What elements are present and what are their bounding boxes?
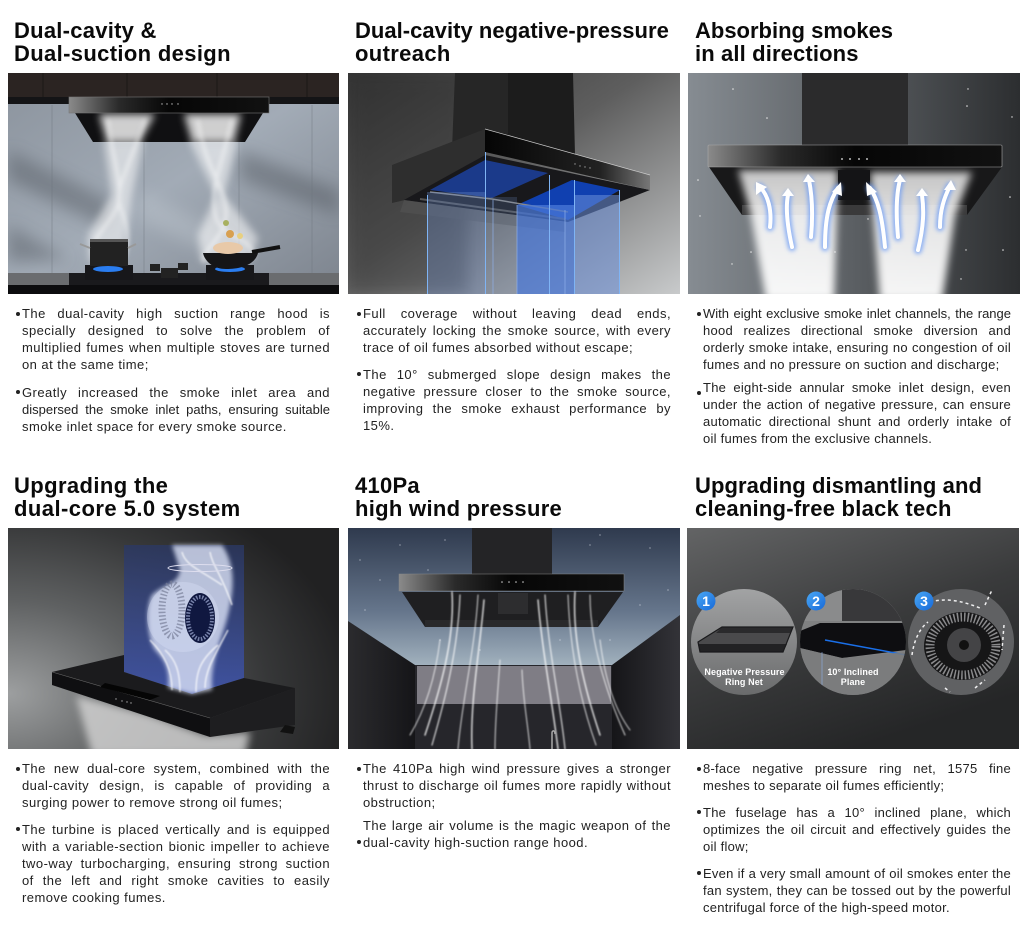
text: column 2 bottom (357, 761, 671, 850)
inset: negative pressure ring net: Negative Pressure (704, 667, 785, 677)
inset: 10 degree inclined plane (800, 589, 906, 695)
text: column 3 top (697, 306, 1011, 446)
photo: hood with blue negative-pressure columns (348, 73, 680, 294)
text: column 3 top: The eight-side annular smoke inlet design, even (703, 380, 1011, 395)
text: column 1 bottom: with a variable-section bionic impeller to achieve (22, 839, 330, 854)
text: column 1 top: Greatly increased the smoke inlet area and (22, 385, 330, 400)
heading: 410Pa high wind pressure: 410Pa (355, 473, 420, 498)
text: column 2 bottom: The 410Pa high wind pressure gives a stronger (363, 761, 671, 776)
smoke streams (738, 170, 972, 300)
wok with food (203, 220, 280, 269)
number badges (696, 592, 934, 610)
text: column 2 top: trace of oil fumes absorbed without escape; (363, 340, 633, 355)
turbine fan (147, 564, 232, 652)
photo: hood over kitchen under starry sky with air streaks (348, 528, 680, 749)
heading: Upgrading dismantling and cleaning-free black tech: Upgrading dismantling and (695, 473, 982, 498)
burners and flames (85, 263, 254, 280)
number badges: 3 (920, 593, 928, 609)
heading: Upgrading dismantling and cleaning-free black tech (695, 473, 982, 521)
heading: Absorbing smokes in all directions: in all directions (695, 41, 859, 66)
text: column 1 top: specially designed to solve the problem of (22, 323, 330, 338)
text: column 2 top: 15%. (363, 418, 394, 433)
text: column 3 top: oil fumes from the exclusive channels. (703, 431, 932, 446)
text: column 1 bottom: dual-cavity design, is capable of providing a (22, 778, 330, 793)
text: column 2 bottom: The large air volume is the magic weapon of the (363, 818, 671, 833)
text: column 2 bottom: obstruction; (363, 795, 436, 810)
text: column 2 bottom: dual-cavity high-suction range hood. (363, 835, 588, 850)
heading: Upgrading the dual-core 5.0 system (14, 473, 241, 521)
pot (80, 239, 136, 266)
text: column 3 top: fumes and no pressure on suction and discharge; (703, 357, 999, 372)
heading: Dual-cavity & Dual-suction design: Dual-cavity & (14, 18, 157, 43)
text: column 1 bottom: of the left and right smoke cavities to easily (22, 873, 330, 888)
heading: Dual-cavity negative-pressure outreach: outreach (355, 41, 451, 66)
text: column 3 top: orderly smoke intake, ensuring no congestion of oil (703, 340, 1011, 355)
text: column 3 bottom: fan system, they can be tossed out by the powerful (703, 883, 1011, 898)
text: column 1 bottom: The turbine is placed vertically and is equipped (22, 822, 330, 837)
inset: 10 degree inclined plane: Plane (841, 677, 865, 687)
text: column 2 top: The 10° submerged slope design makes the (363, 367, 671, 382)
photo: hood above gas stove with two smoke columns (8, 73, 339, 294)
blue suction columns (427, 152, 620, 294)
text: column 3 bottom: 8-face negative pressure ring net, 1575 fine (703, 761, 1011, 776)
text: column 2 top: negative pressure closer to the smoke source, (363, 384, 671, 399)
text: column 1 bottom: The new dual-core system, combined with the (22, 761, 330, 776)
heading: Upgrading the dual-core 5.0 system: Upgrading the (14, 473, 168, 498)
heading: Dual-cavity & Dual-suction design: Dual-suction design (14, 41, 231, 66)
text: column 3 bottom: meshes to separate oil fumes efficiently; (703, 778, 944, 793)
text: column 3 bottom: oil flow; (703, 839, 749, 854)
heading: Upgrading dismantling and cleaning-free black tech: cleaning-free black tech (695, 496, 952, 521)
heading: Absorbing smokes in all directions (695, 18, 893, 66)
text: column 3 top: automatic directional shunt and orderly intake of (703, 414, 1011, 429)
intake arrows (760, 180, 950, 250)
text: column 1 top (16, 306, 330, 434)
text: column 1 bottom (16, 761, 330, 905)
text: column 3 top: With eight exclusive smoke inlet channels, the range (703, 306, 1011, 321)
photo: front view of hood with smoke and blue arrows (688, 73, 1020, 294)
text: column 1 top: multiplied fumes when multiple stoves are turned (22, 340, 330, 355)
text: column 1 bottom: remove cooking fumes. (22, 890, 166, 905)
text: column 2 top (357, 306, 671, 433)
smoke under hood (76, 696, 250, 755)
text: column 3 bottom: centrifugal force of the high-speed motor. (703, 900, 950, 915)
text: column 3 bottom: Even if a very small amount of oil smokes enter the (703, 866, 1011, 881)
text: column 3 bottom: The fuselage has a 10° inclined plane, which (703, 805, 1011, 820)
faucet (552, 731, 555, 749)
text: column 2 top: improving the smoke exhaust performance by (363, 401, 671, 416)
text: column 3 top: hood realizes directional smoke diversion and (703, 323, 1011, 338)
text: column 3 top: under the action of negative pressure, can ensure (703, 397, 1011, 412)
photo: hood with turbine fan in blue panel (8, 528, 339, 749)
heading: Upgrading the dual-core 5.0 system: dual-core 5.0 system (14, 496, 241, 521)
text: column 1 top: The dual-cavity high suction range hood is (22, 306, 330, 321)
inset: 10 degree inclined plane: 10° Inclined (827, 667, 879, 677)
air streaks (410, 592, 630, 749)
text: column 1 bottom: surging power to remove strong oil fumes; (22, 795, 283, 810)
smoke flow through fan (148, 545, 233, 694)
heading: 410Pa high wind pressure (355, 473, 562, 521)
photo: three circular detail insets (687, 528, 1019, 749)
text: column 2 top: accurately locking the smoke source, with every (363, 323, 671, 338)
text: column 2 top: Full coverage without leaving dead ends, (363, 306, 671, 321)
heading: Absorbing smokes in all directions: Absorbing smokes (695, 18, 893, 43)
heading: Dual-cavity & Dual-suction design (14, 18, 231, 66)
text: column 1 bottom: two-way turbocharging, ensuring strong suction (22, 856, 330, 871)
text: column 1 top: smoke inlet space for every smoke source. (22, 419, 287, 434)
heading: 410Pa high wind pressure: high wind pressure (355, 496, 562, 521)
text: column 3 bottom (697, 761, 1011, 915)
inset: negative pressure ring net: Ring Net (725, 677, 763, 687)
heading: Dual-cavity negative-pressure outreach: Dual-cavity negative-pressure (355, 18, 669, 43)
hood body (52, 655, 295, 737)
text: column 2 bottom: thrust to discharge oil fumes more rapidly without (363, 778, 671, 793)
text: column 1 top: on at the same time; (22, 357, 149, 372)
heading: Dual-cavity negative-pressure outreach (355, 18, 669, 66)
text: column 1 top: dispersed the smoke inlet paths, ensuring suitable (22, 402, 330, 417)
inset: negative pressure ring net (691, 589, 797, 695)
inset: centrifugal fan with oil splashes (908, 589, 1014, 695)
number badges: 1 (702, 593, 710, 609)
text: column 3 bottom: optimizes the oil circuit and effectively guides the (703, 822, 1011, 837)
number badges: 2 (812, 593, 820, 609)
